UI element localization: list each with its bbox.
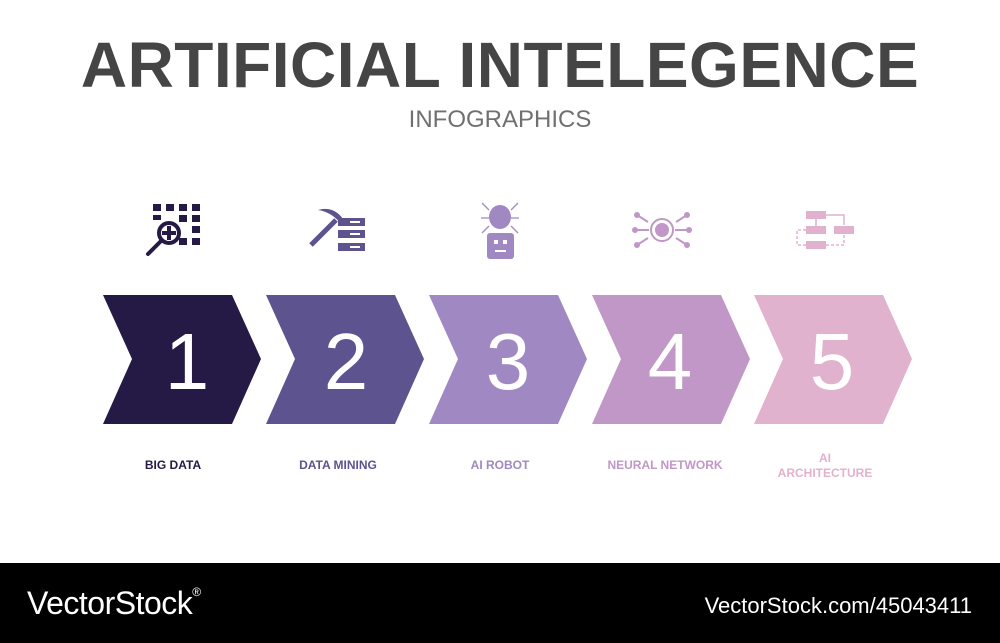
chevron 1 xyxy=(103,295,261,424)
footer xyxy=(0,563,1000,643)
label 3: AI ROBOT xyxy=(471,458,529,472)
chevron 5: 5 xyxy=(810,317,854,406)
label 1: BIG DATA xyxy=(145,458,201,472)
chevron 4: 4 xyxy=(648,317,692,406)
chevron 1: 1 xyxy=(165,317,209,406)
footer url: VectorStock.com/45043411 xyxy=(705,593,972,618)
chevron 2: 2 xyxy=(324,317,368,406)
title: ARTIFICIAL INTELEGENCE xyxy=(81,29,919,101)
icon: data mining xyxy=(311,209,365,251)
chevron 3 xyxy=(429,295,587,424)
chevron 2 xyxy=(266,295,424,424)
icon: ai architecture xyxy=(797,211,854,249)
label 2: DATA MINING xyxy=(299,458,377,472)
label 5 xyxy=(778,451,872,480)
label 5: AI xyxy=(819,451,831,465)
chevron 3: 3 xyxy=(486,317,530,406)
icon: big data xyxy=(148,204,200,254)
chevron 5 xyxy=(754,295,912,424)
icon: ai robot xyxy=(481,203,519,259)
footer logo: VectorStock® xyxy=(27,585,201,621)
label 5: ARCHITECTURE xyxy=(778,466,872,480)
subtitle: INFOGRAPHICS xyxy=(409,106,591,133)
chevron 4 xyxy=(592,295,750,424)
label 4: NEURAL NETWORK xyxy=(607,458,723,472)
icon: neural network xyxy=(632,212,692,248)
